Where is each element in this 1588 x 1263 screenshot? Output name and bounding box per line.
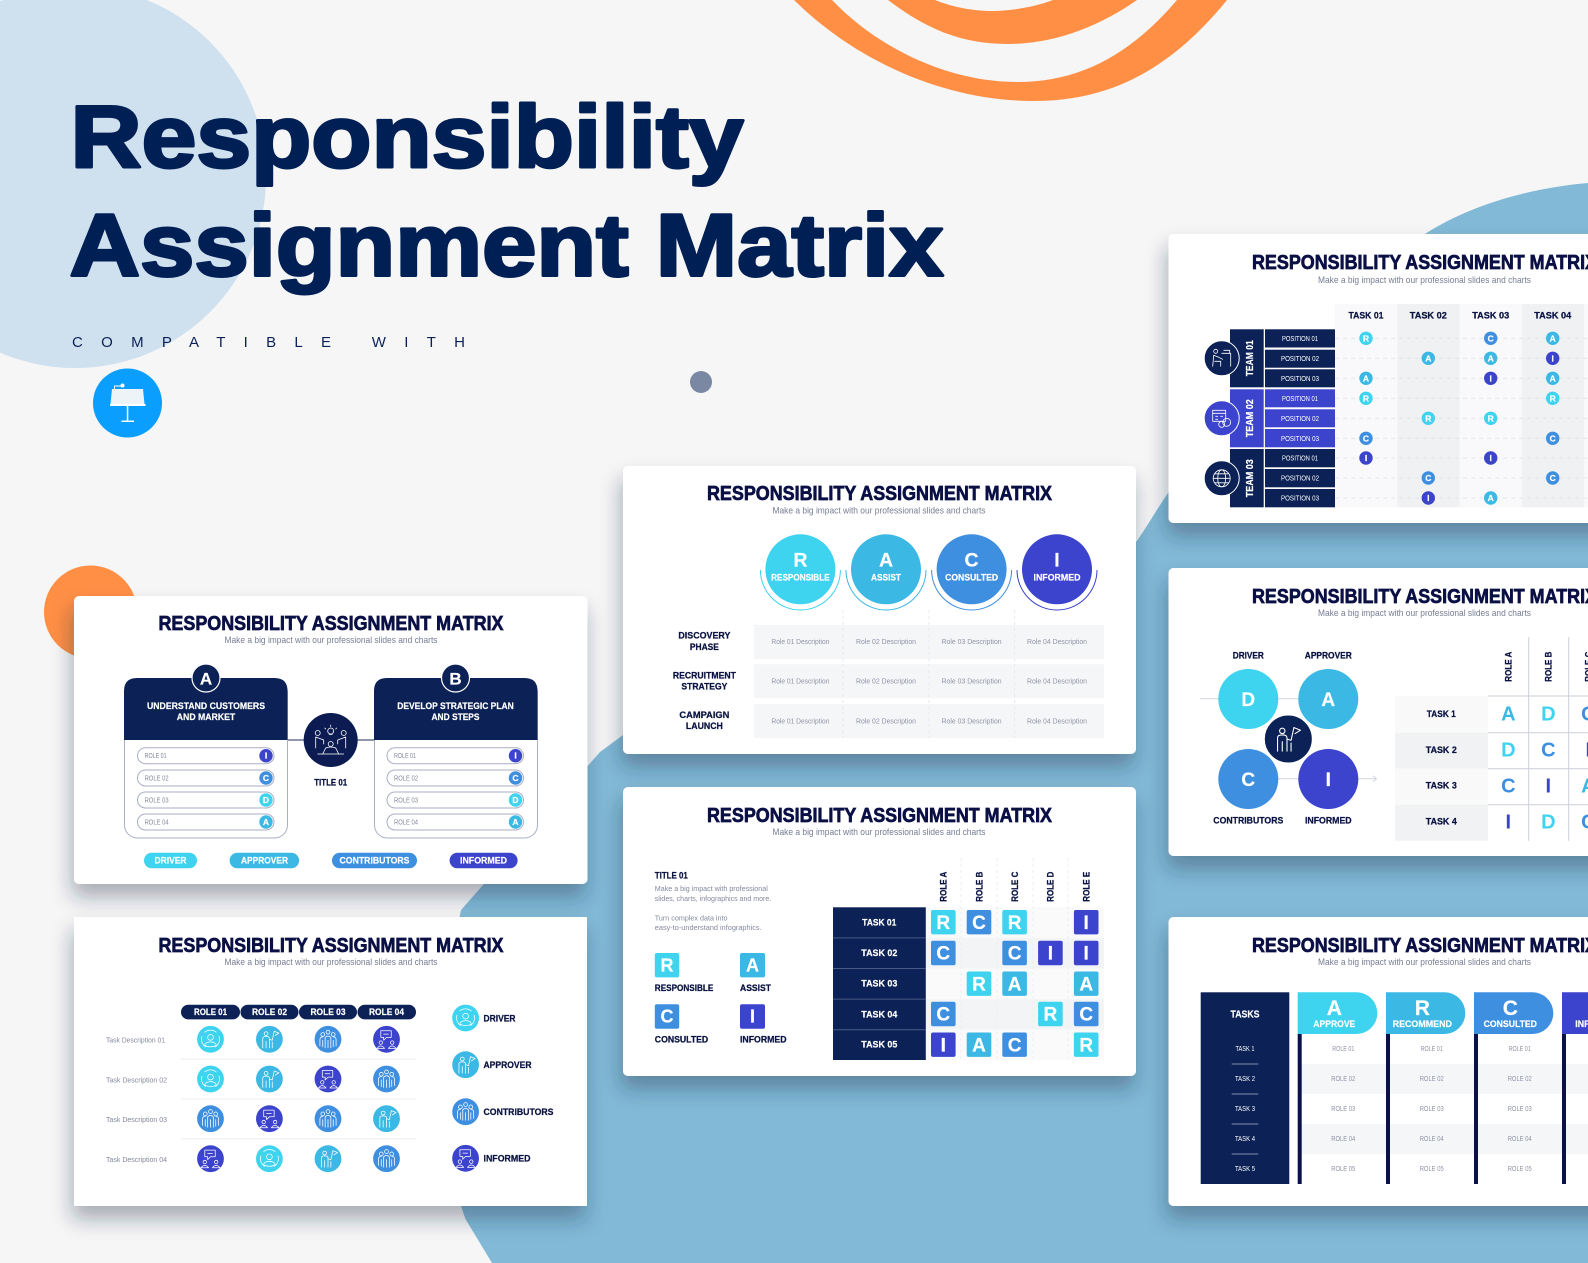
role headers: ROLE C (1010, 872, 1021, 902)
card B: ROLE 02 (394, 776, 418, 782)
team blocks: POSITION 01 (1282, 336, 1318, 343)
row stripes (1300, 1064, 1588, 1154)
role headers: ROLE A (1504, 652, 1514, 682)
cell labels: ROLE 02 (1508, 1076, 1532, 1083)
dots grid: R (1363, 393, 1369, 403)
letter squares: I (1084, 913, 1089, 934)
cell labels: ROLE 02 (1331, 1076, 1355, 1083)
tasks column: TASK 5 (1235, 1166, 1255, 1173)
cell descriptions: Role 04 Description (1027, 637, 1087, 646)
letter squares: R (1079, 1035, 1093, 1056)
team blocks: POSITION 03 (1281, 436, 1319, 443)
card A: AND MARKET (177, 712, 235, 723)
letter grid: I (1546, 776, 1551, 798)
dots grid: I (1427, 493, 1429, 503)
grey dot (690, 371, 712, 393)
card B (374, 664, 538, 838)
legend pills: APPROVER (241, 856, 288, 867)
icon: team 01 desk (1204, 341, 1239, 376)
task column (833, 907, 926, 1060)
icon: leader with flag (1264, 715, 1312, 763)
subheading: Make a big impact with our professional slides and charts (1318, 957, 1531, 968)
letter squares: R (972, 974, 986, 995)
letter squares: C (936, 1005, 950, 1026)
panel: two-column goals (74, 596, 588, 884)
row labels: RECRUITMENT (673, 670, 736, 681)
cell descriptions: Role 04 Description (1027, 716, 1087, 725)
DACI circles: INFORMED (1305, 816, 1352, 827)
cell labels: ROLE 04 (1420, 1136, 1444, 1143)
team blocks: TEAM 02 (1244, 399, 1256, 437)
description text: slides, charts, infographics and more. (655, 894, 771, 903)
DACI circles (1213, 650, 1358, 827)
letter grid: D (1501, 740, 1516, 762)
column dividers (843, 610, 1015, 738)
subheading: Make a big impact with our professional slides and charts (224, 957, 438, 968)
DACI circles: DRIVER (1233, 650, 1264, 661)
task rows: TASK 2 (1426, 745, 1457, 756)
dots grid (1359, 332, 1559, 505)
cell descriptions: Role 02 Description (856, 637, 916, 646)
cell labels: ROLE 01 (1332, 1046, 1354, 1053)
legend: I (750, 1007, 755, 1027)
legend: ASSIST (740, 983, 771, 994)
task column: TASK 04 (861, 1009, 898, 1020)
RACI circles: CONSULTED (945, 573, 998, 584)
cell labels: ROLE 05 (1331, 1166, 1355, 1173)
blue background shape (448, 183, 1588, 1263)
card B: ROLE 04 (394, 820, 418, 826)
description text: Make a big impact with professional (655, 884, 768, 893)
dots grid: I (1490, 373, 1492, 383)
card B: I (514, 751, 517, 761)
cell descriptions: Role 01 Description (771, 677, 829, 686)
panel: ARCI columns (1168, 917, 1588, 1206)
task columns: TASK 01 (1348, 310, 1384, 321)
card B: ROLE 01 (394, 753, 416, 760)
cell labels: ROLE 05 (1420, 1166, 1444, 1173)
team blocks: POSITION 03 (1281, 376, 1319, 383)
panel: RACI circles table (623, 466, 1136, 754)
role headers: ROLE 02 (252, 1007, 287, 1018)
title 01: TITLE 01 (314, 778, 348, 789)
cell descriptions: Role 03 Description (942, 716, 1002, 725)
card B: A (512, 817, 519, 827)
legend: CONTRIBUTORS (484, 1107, 554, 1118)
cell descriptions: Role 03 Description (942, 637, 1002, 646)
team blocks: POSITION 03 (1281, 496, 1319, 502)
connectors and arrow (1200, 699, 1376, 782)
column headers: APPROVE (1313, 1019, 1355, 1030)
role headers: ROLE 01 (194, 1007, 228, 1018)
subheading: Make a big impact with our professional slides and charts (772, 506, 986, 517)
cell descriptions (771, 637, 1087, 725)
connector lines (287, 739, 374, 741)
tasks column: TASK 2 (1235, 1076, 1255, 1083)
card A: ROLE 02 (145, 776, 169, 782)
letter grid: C (1501, 776, 1516, 798)
cell labels: ROLE 01 (1509, 1046, 1531, 1053)
heading: RESPONSIBILITY ASSIGNMENT MATRIX (158, 935, 504, 957)
heading: RESPONSIBILITY ASSIGNMENT MATRIX (707, 805, 1053, 827)
cell descriptions: Role 02 Description (856, 677, 916, 686)
letter squares: A (1008, 974, 1022, 995)
orange arcs (794, 0, 1227, 101)
heading: RESPONSIBILITY ASSIGNMENT MATRIX (707, 483, 1053, 505)
role headers: ROLE E (1082, 872, 1092, 902)
task descriptions (106, 1036, 167, 1164)
dots grid: C (1363, 433, 1369, 443)
subheading: Make a big impact with our professional slides and charts (1318, 608, 1531, 619)
dots grid: C (1550, 473, 1556, 483)
card A: ROLE 03 (145, 798, 169, 804)
dots grid: R (1425, 413, 1431, 423)
column headers: A (1327, 997, 1342, 1020)
dots grid: I (1365, 453, 1367, 463)
legend pills (144, 853, 518, 868)
task rows: TASK 3 (1426, 781, 1457, 792)
role headers (181, 1005, 416, 1019)
role headers (1504, 652, 1588, 682)
description text (655, 871, 771, 932)
card A: D (263, 795, 269, 805)
panel: teams and positions (1168, 234, 1588, 523)
task descriptions: Task Description 03 (106, 1115, 167, 1124)
card B: C (512, 773, 519, 783)
role headers: ROLE B (974, 872, 985, 902)
RACI circles: C (965, 550, 979, 572)
card A: C (263, 773, 269, 783)
compatible with label: COMPATIBLE WITH (72, 334, 465, 351)
column bars (1298, 1034, 1566, 1184)
orange circle (44, 566, 137, 658)
cell labels: ROLE 03 (1508, 1106, 1532, 1113)
cell labels: ROLE 04 (1508, 1136, 1532, 1143)
RACI circles: RESPONSIBLE (771, 573, 830, 584)
letter squares: C (936, 944, 950, 965)
task descriptions: Task Description 01 (106, 1036, 165, 1045)
RACI circles: I (1054, 550, 1060, 572)
panel: DACI circles and table (1168, 568, 1588, 856)
icon grid (197, 1026, 400, 1172)
task columns: TASK 04 (1534, 310, 1572, 321)
team blocks: TEAM 03 (1244, 459, 1256, 497)
column headers: C (1503, 997, 1518, 1020)
task column: TASK 01 (862, 917, 897, 928)
task rows: TASK 1 (1427, 709, 1456, 720)
tasks column: TASKS (1230, 1009, 1260, 1020)
light blue circle (0, 0, 266, 368)
panel: RACI letter grid (623, 787, 1136, 1076)
letter squares: C (1008, 944, 1022, 965)
role headers: ROLE 03 (310, 1007, 346, 1018)
card A: ROLE 01 (145, 753, 167, 760)
dots grid: A (1425, 353, 1431, 363)
letter grid: A (1501, 704, 1516, 726)
legend: CONSULTED (655, 1034, 708, 1045)
row labels: LAUNCH (686, 721, 723, 732)
team blocks: POSITION 02 (1281, 356, 1319, 363)
RACI circles: A (879, 550, 893, 572)
cell labels (1331, 1046, 1532, 1173)
row dividers (181, 1059, 416, 1139)
RACI circles: R (793, 550, 807, 572)
team blocks: POSITION 02 (1281, 416, 1319, 423)
legend (655, 953, 787, 1045)
cell labels: ROLE 04 (1331, 1136, 1355, 1143)
description text: easy-to-understand infographics. (655, 923, 762, 932)
team blocks: POSITION 01 (1282, 456, 1318, 462)
column headers (1298, 992, 1588, 1034)
cell descriptions: Role 02 Description (856, 716, 916, 725)
letter squares: I (1084, 944, 1089, 965)
legend pills: INFORMED (460, 856, 507, 867)
legend: APPROVER (484, 1060, 532, 1071)
legend: A (746, 956, 759, 976)
card B: DEVELOP STRATEGIC PLAN (397, 701, 514, 712)
column headers: RECOMMEND (1393, 1019, 1452, 1030)
legend (452, 1005, 554, 1172)
letter squares: R (936, 913, 950, 934)
table rows (754, 625, 1104, 738)
role headers: ROLE A (938, 872, 950, 902)
task column: TASK 02 (861, 948, 897, 959)
row labels (673, 631, 736, 732)
description text: Turn complex data into (655, 913, 728, 922)
icon: team 02 calendar (1204, 401, 1239, 436)
cell labels: ROLE 02 (1420, 1076, 1444, 1083)
RACI circles (760, 534, 1097, 610)
DACI circles: CONTRIBUTORS (1213, 816, 1283, 827)
task descriptions: Task Description 04 (106, 1155, 167, 1164)
card A: I (265, 751, 267, 761)
task columns: TASK 03 (1472, 310, 1509, 321)
main title: Assignment Matrix (70, 196, 944, 294)
legend: RESPONSIBLE (655, 983, 713, 994)
letter squares (931, 910, 1098, 1057)
cell labels: ROLE 03 (1420, 1106, 1444, 1113)
dots grid: C (1425, 473, 1431, 483)
legend pills: DRIVER (154, 856, 187, 867)
team blocks (1230, 329, 1335, 507)
row labels: CAMPAIGN (679, 710, 730, 721)
card A: A (263, 817, 269, 827)
subheading: Make a big impact with our professional slides and charts (224, 635, 438, 646)
team blocks: POSITION 02 (1281, 476, 1319, 482)
dots grid: C (1550, 433, 1556, 443)
dots grid: A (1363, 373, 1369, 383)
icon: keynote (93, 368, 162, 438)
main title: Responsibility (70, 87, 744, 186)
task descriptions: Task Description 02 (106, 1076, 167, 1084)
letter grid: D (1541, 704, 1556, 726)
cell descriptions: Role 04 Description (1027, 677, 1087, 686)
cell labels: ROLE 03 (1331, 1106, 1355, 1113)
task rows (1395, 696, 1488, 841)
row labels: STRATEGY (681, 681, 728, 692)
subheading: Make a big impact with our professional slides and charts (772, 827, 986, 838)
dots grid: A (1550, 373, 1556, 383)
task column: TASK 05 (861, 1040, 898, 1051)
legend pills: CONTRIBUTORS (340, 856, 410, 867)
card A: UNDERSTAND CUSTOMERS (147, 701, 265, 712)
DACI circles: APPROVER (1305, 650, 1352, 661)
dots grid: C (1488, 333, 1494, 343)
card A: A (200, 670, 212, 688)
tasks column: TASK 3 (1235, 1106, 1255, 1113)
cell descriptions: Role 01 Description (771, 716, 829, 725)
dots grid: I (1490, 453, 1492, 463)
card B: D (512, 795, 519, 805)
DACI circles: D (1241, 690, 1255, 711)
dots grid: R (1488, 413, 1494, 423)
letter squares: A (972, 1035, 986, 1056)
dots grid: R (1550, 393, 1556, 403)
role headers: ROLE D (1046, 872, 1057, 902)
row labels: PHASE (690, 642, 719, 653)
panel: icon matrix (74, 917, 587, 1206)
DACI circles: A (1321, 690, 1335, 711)
icon: team meeting (304, 713, 358, 767)
task columns: TASK 02 (1410, 310, 1447, 321)
letter squares: C (1008, 1035, 1022, 1056)
card B: B (449, 670, 462, 688)
letter squares: A (1079, 974, 1093, 995)
task column: TASK 03 (861, 979, 897, 990)
grid lines (1488, 637, 1588, 841)
role headers (938, 872, 1092, 902)
dots grid: A (1488, 353, 1494, 363)
main title (70, 87, 944, 294)
role headers: ROLE B (1544, 652, 1554, 682)
role headers: ROLE 04 (369, 1007, 405, 1018)
RACI circles: INFORMED (1034, 573, 1081, 584)
task rows: TASK 4 (1426, 817, 1457, 828)
card A (124, 664, 288, 838)
card B: ROLE 03 (394, 798, 418, 804)
cell descriptions: Role 03 Description (942, 677, 1002, 686)
team blocks: POSITION 01 (1282, 396, 1318, 403)
DACI circles: C (1241, 770, 1255, 791)
RACI circles: ASSIST (871, 573, 901, 584)
letter squares: I (1048, 944, 1053, 965)
letter squares: I (941, 1035, 946, 1056)
row labels: DISCOVERY (678, 631, 731, 642)
row guide lines (1335, 338, 1588, 498)
card B: AND STEPS (432, 712, 480, 723)
description text: TITLE 01 (655, 871, 688, 882)
letter grid: C (1541, 740, 1556, 762)
grid background (926, 858, 1104, 1060)
heading: RESPONSIBILITY ASSIGNMENT MATRIX (158, 613, 504, 635)
letter grid: I (1506, 812, 1511, 834)
column headers: R (1415, 997, 1430, 1020)
DACI circles: I (1326, 770, 1331, 791)
tasks column: TASK 4 (1235, 1136, 1255, 1143)
card A: ROLE 04 (145, 820, 169, 826)
dots grid: R (1363, 333, 1369, 343)
dots grid: A (1488, 493, 1494, 503)
letter squares: C (972, 913, 986, 934)
legend: INFORMED (740, 1034, 787, 1045)
letter grid (1501, 704, 1588, 834)
legend: DRIVER (484, 1013, 516, 1024)
letter squares: C (1079, 1005, 1093, 1026)
letter squares: R (1008, 913, 1022, 934)
letter grid: D (1541, 812, 1556, 834)
cell labels: ROLE 01 (1421, 1046, 1443, 1053)
tasks column (1201, 992, 1289, 1184)
dots grid: A (1550, 333, 1556, 343)
task columns (1335, 304, 1588, 507)
legend: INFORMED (484, 1154, 531, 1165)
cell labels: ROLE 05 (1508, 1166, 1532, 1173)
subheading: Make a big impact with our professional slides and charts (1318, 275, 1531, 286)
team blocks: TEAM 01 (1244, 340, 1256, 376)
tasks column: TASK 1 (1236, 1046, 1255, 1053)
legend: C (660, 1007, 674, 1027)
dots grid: I (1552, 353, 1554, 363)
icon: team 03 globe (1204, 461, 1239, 496)
legend: R (660, 956, 674, 976)
cell descriptions: Role 01 Description (771, 637, 829, 646)
column headers: CONSULTED (1484, 1019, 1537, 1030)
letter squares: R (1044, 1005, 1058, 1026)
